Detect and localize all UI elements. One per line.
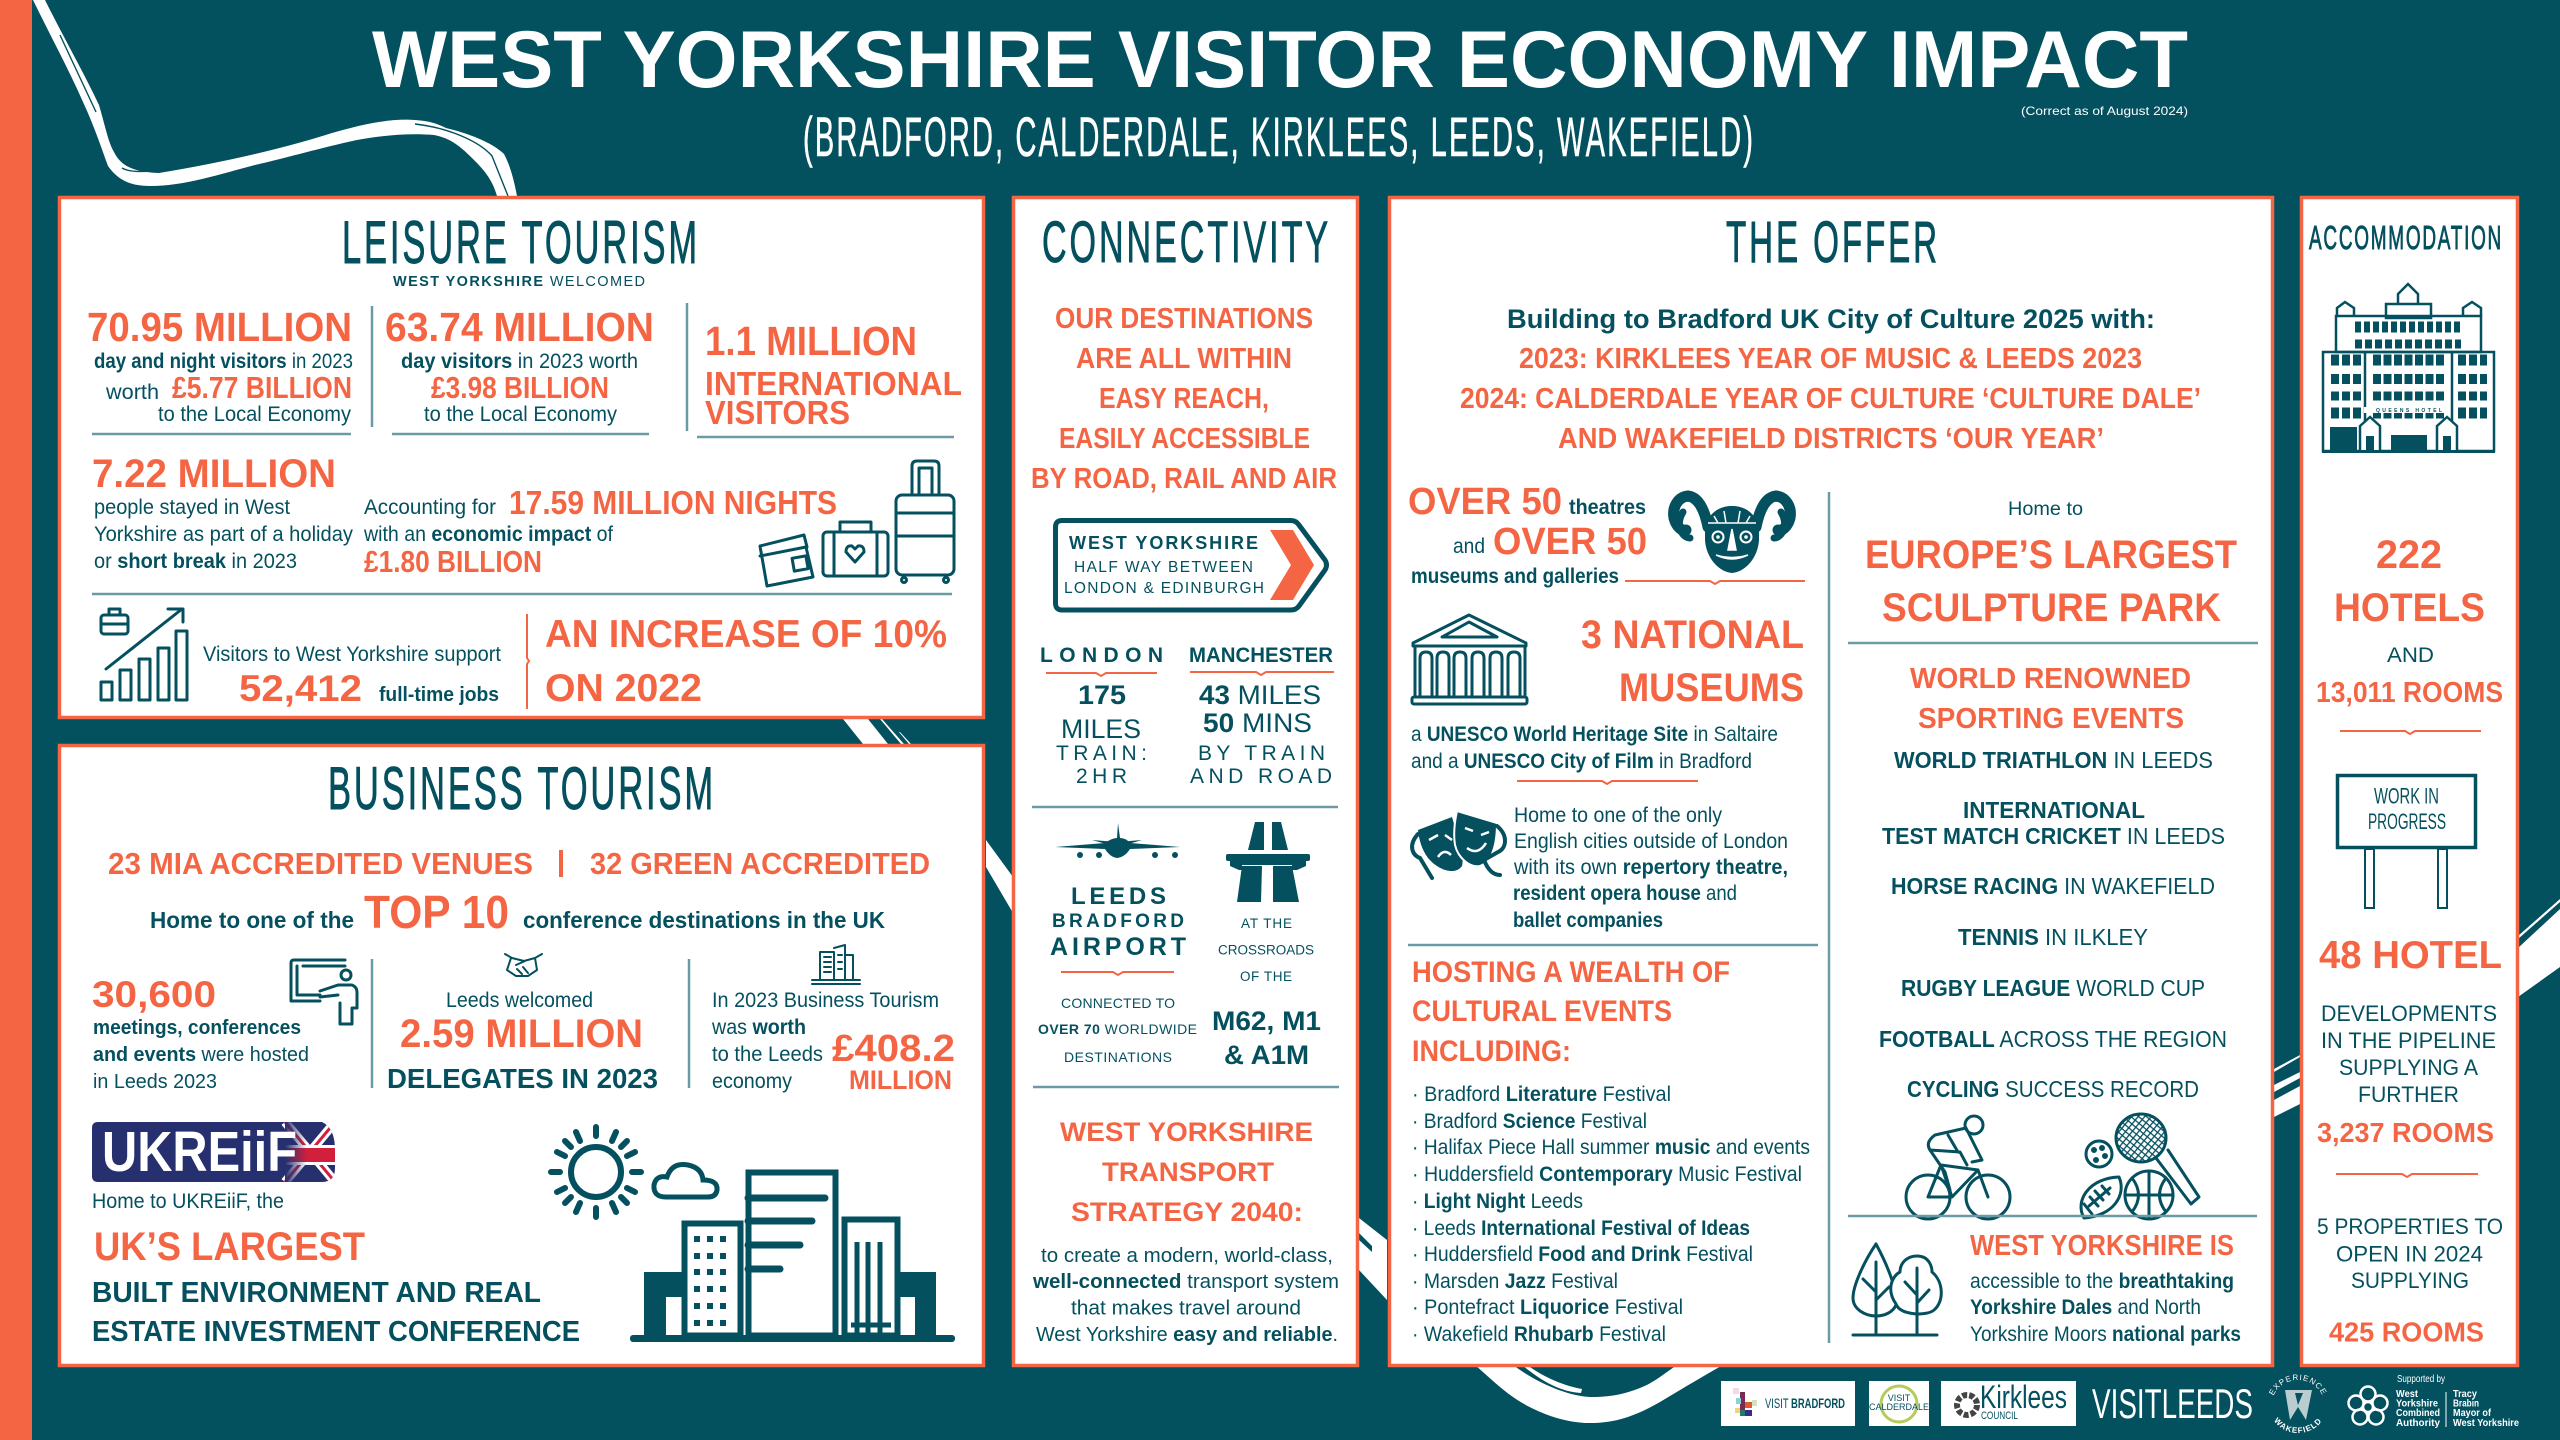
stat: 63.74 million: day visitors in 2023 worth [401, 350, 638, 373]
stat: 63.74 million: £3.98 BILLION [431, 370, 609, 405]
heading: business tourism: BUSINESS TOURISM [328, 755, 716, 822]
icon: mask [1674, 496, 1790, 573]
text: repertory theatre [1513, 804, 1788, 932]
stat: £408.2 million: In 2023 Business Tourism [712, 989, 939, 1012]
stat: international visitors: VISITORS [705, 394, 850, 431]
stat: 70.95 million: £5.77 BILLION [172, 370, 352, 405]
text: transport strategy: TRANSPORT [1102, 1157, 1275, 1187]
stat: 70.95 million: 70.95 MILLION [87, 304, 352, 350]
stat: 30,600 meetings: and events were hosted [93, 1043, 309, 1066]
text: Leeds Bradford Airport: BRADFORD [1052, 911, 1184, 932]
icon: office buildings [812, 945, 860, 984]
list: festivals: · Huddersfield Contemporary Music Festival [1412, 1163, 1802, 1186]
list: sporting events: TENNIS IN ILKLEY [1958, 924, 2148, 950]
text: UNESCO: and a UNESCO City of Film in Bradford [1411, 750, 1752, 773]
text: destinations within reach: ARE ALL WITHIN [1076, 343, 1292, 375]
stat: 5 properties [2317, 1214, 2503, 1348]
stat: £408.2 million: to the Leeds [712, 1043, 823, 1066]
text: transport strategy: WEST YORKSHIRE [1060, 1117, 1313, 1147]
stat: over 50 theatres and museums: OVER 50 [1408, 481, 1562, 523]
stat: 222 hotels: HOTELS [2334, 586, 2485, 630]
list: sporting events: WORLD RENOWNED [1910, 663, 2191, 695]
stat: 30,600 meetings: meetings, conferences [93, 1016, 301, 1039]
text: repertory theatre: Home to one of the only [1514, 804, 1722, 827]
text: crossroads of motorways: CROSSROADS [1218, 942, 1314, 958]
date note: (Correct as of August 2024) [2021, 104, 2188, 118]
stat: 48 hotel developments: FURTHER [2358, 1082, 2459, 1107]
text: crossroads of motorways: OF THE [1240, 969, 1292, 984]
stat: 7.22 million: people stayed in West [94, 496, 290, 519]
list: sporting events: TEST MATCH CRICKET IN LEEDS [1882, 823, 2225, 849]
panel: the offer [1390, 198, 2272, 1366]
logo: West Yorkshire Combined Authority [2348, 1374, 2519, 1429]
list: festivals: · Huddersfield Food and Drink Festival [1412, 1243, 1753, 1266]
accreditation line: 32 GREEN ACCREDITED [590, 846, 930, 881]
text: Leeds Bradford Airport: OVER 70 WORLDWIDE [1038, 1021, 1197, 1037]
stat: over 50 theatres and museums [1408, 481, 1805, 588]
stat: 63.74 million: to the Local Economy [424, 403, 617, 426]
stat: 5 properties: 425 ROOMS [2329, 1316, 2484, 1348]
road sign: halfway between London and Edinburgh: LONDON & EDINBURGH [1064, 580, 1264, 597]
stat: £408.2 million [711, 989, 955, 1095]
logo: West Yorkshire Combined Authority: Yorkshire [2396, 1398, 2438, 1410]
logo: West Yorkshire Combined Authority: Mayor of [2453, 1407, 2491, 1419]
stat: 5 properties: SUPPLYING [2351, 1268, 2469, 1293]
distance: Manchester: 50 MINS [1203, 708, 1312, 738]
title: WEST YORKSHIRE VISITOR ECONOMY IMPACT [372, 15, 2188, 105]
text: national parks: WEST YORKSHIRE IS [1970, 1230, 2234, 1262]
top 10 line: Home to one of the [150, 907, 354, 933]
icon: theatre masks [1412, 811, 1505, 878]
heading: leisure tourism: LEISURE TOURISM [342, 209, 700, 276]
logo: West Yorkshire Combined Authority: Combined [2396, 1407, 2440, 1419]
text: national parks: Yorkshire Moors national parks [1970, 1323, 2241, 1346]
stat: 7.22 million: 7.22 MILLION [92, 452, 336, 496]
text: transport strategy: well-connected transport system [1032, 1271, 1339, 1293]
text: crossroads of motorways: M62, M1 [1212, 1006, 1321, 1036]
road sign: halfway between London and Edinburgh: WEST YORKSHIRE [1069, 533, 1258, 553]
stat: 3 national museums [1581, 613, 1804, 710]
icon: motorway [1226, 822, 1310, 902]
icon: aeroplane [1055, 823, 1180, 858]
text: destinations within reach: OUR DESTINATIONS [1055, 303, 1313, 335]
logo: West Yorkshire Combined Authority: Authority [2396, 1417, 2440, 1429]
text: destinations within reach: BY ROAD, RAIL AND AIR [1031, 463, 1337, 495]
text: repertory theatre: ballet companies [1513, 909, 1663, 932]
icon: hotel building: QUEENS HOTEL [2376, 408, 2442, 414]
stat: 48 hotel developments: SUPPLYING A [2339, 1055, 2478, 1080]
stat: 63.74 million [385, 304, 654, 434]
stat: 7.22 million: Yorkshire as part of a holiday [94, 523, 353, 546]
stat: 3 national museums: 3 NATIONAL [1581, 613, 1804, 657]
stat: full-time jobs: Visitors to West Yorkshire support [203, 643, 501, 666]
stat: international visitors [697, 318, 962, 437]
icon: trees [1853, 1244, 1941, 1335]
text: transport strategy: West Yorkshire easy and reliable. [1036, 1324, 1338, 1346]
icon: sports balls and racket [2081, 1114, 2199, 1219]
stat: increase of 10%: ON 2022 [545, 667, 702, 710]
accreditation line: 23 MIA ACCREDITED VENUES [108, 846, 533, 881]
logo: Experience Wakefield: WAKEFIELD [2274, 1417, 2320, 1434]
stat: over 50 theatres and museums: OVER 50 [1493, 521, 1647, 563]
stat: 7.22 million: or short break in 2023 [94, 550, 297, 573]
sign: work in progress [2338, 776, 2476, 908]
text: destinations within reach [1031, 303, 1337, 495]
distance: Manchester: BY TRAIN [1198, 742, 1325, 765]
stat: 2.59 million delegates: DELEGATES IN 2023 [387, 1063, 658, 1094]
stat: 48 hotel developments: IN THE PIPELINE [2321, 1028, 2496, 1053]
stat: 70.95 million: to the Local Economy [158, 403, 351, 426]
logo: Kirklees Council: Kirklees [1980, 1379, 2067, 1415]
icon: presenter [291, 960, 357, 1024]
list: festivals: · Bradford Literature Festival [1412, 1083, 1671, 1106]
logo: Kirklees Council: COUNCIL [1981, 1410, 2018, 1422]
heading: connectivity: CONNECTIVITY [1042, 210, 1331, 275]
list: sporting events [1879, 663, 2227, 1102]
text: crossroads of motorways: AT THE [1241, 916, 1292, 931]
list: sporting events: FOOTBALL ACROSS THE REGION [1879, 1026, 2227, 1052]
stat: £408.2 million: MILLION [849, 1065, 952, 1095]
stat: 222 hotels: 13,011 ROOMS [2316, 677, 2503, 709]
text: crossroads of motorways: & A1M [1224, 1040, 1309, 1070]
logo: UKREiiF: UKREiiF [102, 1120, 297, 1184]
logo: West Yorkshire Combined Authority: Brabin [2453, 1398, 2479, 1410]
text: city of culture: Building to Bradford UK City of Culture 2025 with: [1507, 304, 2155, 334]
text: largest conference: UK’S LARGEST [94, 1225, 365, 1269]
stat: 48 hotel developments: 3,237 ROOMS [2317, 1117, 2494, 1148]
stat: 5 properties: OPEN IN 2024 [2336, 1242, 2483, 1266]
stat: 48 hotel developments [2317, 934, 2502, 1177]
distance: London: LONDON [1040, 644, 1163, 667]
stat: 48 hotel developments: DEVELOPMENTS [2321, 1001, 2497, 1026]
text: city of culture: AND WAKEFIELD DISTRICTS ‘OUR YEAR’ [1558, 423, 2104, 455]
stat: 7.22 million [92, 452, 353, 573]
distance: London [1040, 644, 1163, 788]
text: transport strategy [1032, 1117, 1339, 1346]
panel: connectivity [1014, 198, 1358, 1366]
stat: full-time jobs: 52,412 [239, 668, 362, 709]
stat: 222 hotels: 222 [2376, 533, 2442, 577]
stat: 2.59 million delegates: Leeds welcomed [446, 989, 593, 1012]
heading: the offer: THE OFFER [1726, 210, 1940, 275]
list: festivals: · Leeds International Festival of Ideas [1412, 1217, 1750, 1240]
text: UNESCO [1411, 723, 1778, 784]
accreditation line [108, 846, 930, 881]
stat: international visitors: 1.1 MILLION [705, 318, 917, 364]
icon: museum building [1412, 615, 1527, 704]
text: repertory theatre: resident opera house and [1513, 882, 1737, 905]
distance: Manchester: 43 MILES [1199, 680, 1321, 710]
text: transport strategy: STRATEGY 2040: [1071, 1197, 1303, 1227]
text: largest conference: BUILT ENVIRONMENT AND REAL [92, 1277, 541, 1309]
icon: luggage and wallet [760, 461, 954, 586]
list: sporting events: WORLD TRIATHLON IN LEEDS [1894, 747, 2213, 773]
icon: handshake [505, 954, 542, 976]
list: festivals: · Bradford Science Festival [1412, 1110, 1647, 1133]
stat: sculpture park [1865, 499, 2237, 630]
logo: Visit Calderdale: CALDERDALE [1869, 1402, 1929, 1412]
logo: Kirklees Council [1941, 1379, 2076, 1426]
stat: international visitors: INTERNATIONAL [705, 365, 962, 402]
text: Leeds Bradford Airport: CONNECTED TO [1061, 995, 1175, 1011]
text: transport strategy: that makes travel around [1071, 1298, 1301, 1320]
logo: Visit Bradford [1721, 1381, 1855, 1426]
stat: 3 national museums: MUSEUMS [1619, 666, 1804, 710]
stat: 48 hotel developments: 48 HOTEL [2319, 934, 2502, 977]
icon: city skyline with sun and cloud [551, 1127, 955, 1342]
stat: 17.59 million nights: Accounting for [364, 496, 496, 519]
logo: Visit Calderdale [1869, 1381, 1929, 1426]
logo: Experience Wakefield [2268, 1374, 2327, 1434]
top 10 line: TOP 10 [364, 886, 509, 938]
list: festivals: · Wakefield Rhubarb Festival [1412, 1323, 1666, 1346]
stat: 30,600 meetings [92, 974, 309, 1093]
stat: 17.59 million nights: with an economic impact of [363, 523, 613, 546]
stat: 17.59 million nights: £1.80 BILLION [364, 544, 542, 579]
stat: sculpture park: Home to [2008, 499, 2083, 520]
road sign: halfway between London and Edinburgh: HALF WAY BETWEEN [1074, 559, 1253, 576]
text: crossroads of motorways [1212, 916, 1321, 1070]
list: festivals: · Pontefract Liquorice Festival [1412, 1296, 1683, 1319]
stat: 5 properties: 5 PROPERTIES TO [2317, 1214, 2503, 1239]
stat: 70.95 million [87, 304, 353, 434]
top 10 line: conference destinations in the UK [523, 907, 885, 933]
text: national parks: accessible to the breathtaking [1970, 1270, 2234, 1293]
stat: increase of 10%: AN INCREASE OF 10% [545, 613, 947, 656]
stat: increase of 10% [545, 613, 947, 710]
text: Leeds Bradford Airport: LEEDS [1071, 883, 1166, 910]
stat: over 50 theatres and museums: and [1453, 535, 1485, 558]
icon: growth chart [101, 609, 187, 700]
stat: 2.59 million delegates: 2.59 MILLION [400, 1012, 643, 1056]
distance: Manchester: AND ROAD [1190, 765, 1332, 788]
stat: £408.2 million: was worth [711, 1016, 806, 1039]
text: Leeds Bradford Airport: AIRPORT [1050, 933, 1186, 961]
text: largest conference: ESTATE INVESTMENT CONFERENCE [92, 1316, 580, 1348]
stat: 222 hotels: AND [2387, 644, 2434, 667]
stat: 17.59 million nights: 17.59 MILLION NIGHTS [509, 484, 837, 521]
logo: Experience Wakefield: EXPERIENCE [2268, 1374, 2327, 1396]
road sign: halfway between London and Edinburgh [1056, 520, 1326, 610]
subheading: WEST YORKSHIRE WELCOMED [393, 274, 647, 290]
list: sporting events: INTERNATIONAL [1963, 797, 2145, 823]
list: festivals: · Marsden Jazz Festival [1412, 1270, 1618, 1293]
list: sporting events: CYCLING SUCCESS RECORD [1907, 1076, 2199, 1102]
logo: West Yorkshire Combined Authority: Tracy [2453, 1388, 2477, 1400]
stat: 17.59 million nights [363, 484, 837, 579]
heading: cultural events: HOSTING A WEALTH OF [1412, 956, 1730, 989]
stat: £408.2 million: economy [712, 1070, 792, 1093]
text: repertory theatre: English cities outside of London [1514, 830, 1788, 853]
stat: over 50 theatres and museums: museums and galleries [1411, 565, 1619, 588]
heading: cultural events: INCLUDING: [1412, 1035, 1571, 1068]
heading: cultural events [1412, 956, 1730, 1068]
list: festivals: · Light Night Leeds [1412, 1190, 1583, 1213]
text: city of culture: 2024: CALDERDALE YEAR OF CULTURE ‘CULTURE DALE’ [1460, 383, 2201, 415]
logo: Visit Leeds: VISITLEEDS [2092, 1380, 2253, 1427]
top 10 line [150, 886, 885, 938]
list: sporting events: HORSE RACING IN WAKEFIELD [1891, 873, 2215, 899]
text: largest conference: Home to UKREiiF, the [92, 1190, 284, 1213]
orange side bar [0, 0, 32, 1440]
stat: 70.95 million: worth [105, 381, 159, 404]
text: largest conference [92, 1190, 580, 1348]
distance: Manchester [1189, 644, 1334, 788]
icon: cyclist [1906, 1116, 2010, 1219]
list: festivals: · Halifax Piece Hall summer music and events [1412, 1136, 1810, 1159]
text: city of culture [1460, 304, 2201, 455]
icon: hotel building [2322, 284, 2495, 453]
sign: work in progress: PROGRESS [2368, 809, 2446, 834]
text: national parks: Yorkshire Dales and North [1970, 1296, 2201, 1319]
logo: Visit Calderdale: VISIT [1888, 1393, 1911, 1403]
logo: West Yorkshire Combined Authority: Supported by [2397, 1374, 2445, 1385]
text: city of culture: 2023: KIRKLEES YEAR OF MUSIC & LEEDS 2023 [1519, 343, 2142, 375]
panel: accommodation [2302, 198, 2518, 1366]
text: Leeds Bradford Airport [1038, 883, 1197, 1065]
stat: 222 hotels [2316, 533, 2503, 734]
stat: 63.74 million: 63.74 MILLION [385, 304, 654, 350]
distance: London: 2HR [1076, 765, 1127, 788]
sign: work in progress: WORK IN [2374, 784, 2439, 808]
stat: full-time jobs [203, 643, 501, 709]
stat: 30,600 meetings: in Leeds 2023 [93, 1070, 217, 1093]
stat: 2.59 million delegates [387, 989, 658, 1094]
text: national parks [1970, 1230, 2241, 1346]
text: repertory theatre: with its own repertory theatre, [1513, 856, 1788, 879]
distance: Manchester: MANCHESTER [1189, 644, 1333, 667]
stat: 70.95 million: day and night visitors in 2023 [94, 350, 353, 373]
panel: leisure tourism [60, 198, 984, 718]
stat: sculpture park: EUROPE’S LARGEST [1865, 533, 2237, 577]
list: sporting events: SPORTING EVENTS [1918, 703, 2184, 735]
stat: sculpture park: SCULPTURE PARK [1882, 586, 2221, 630]
stat: full-time jobs: full-time jobs [379, 684, 499, 706]
logo: West Yorkshire Combined Authority: West [2396, 1388, 2418, 1400]
list: sporting events: RUGBY LEAGUE WORLD CUP [1901, 975, 2205, 1001]
distance: London: TRAIN: [1056, 742, 1147, 765]
logo: West Yorkshire Combined Authority: West Yorkshire [2453, 1417, 2519, 1429]
stat: £408.2 million: £408.2 [832, 1028, 955, 1070]
stat: 30,600 meetings: 30,600 [92, 974, 216, 1015]
logo: Visit Bradford: VISIT BRADFORD [1765, 1395, 1845, 1411]
heading: cultural events: CULTURAL EVENTS [1412, 995, 1672, 1028]
distance: London: 175 [1078, 680, 1126, 710]
text: destinations within reach: EASY REACH, [1099, 383, 1269, 415]
panel: business tourism [60, 746, 984, 1366]
distance: London: MILES [1061, 714, 1141, 744]
stat: over 50 theatres and museums: theatres [1569, 496, 1646, 519]
text: Leeds Bradford Airport: DESTINATIONS [1064, 1049, 1172, 1065]
list: festivals [1412, 1083, 1810, 1346]
text: destinations within reach: EASILY ACCESSIBLE [1059, 423, 1310, 455]
text: UNESCO: a UNESCO World Heritage Site in Saltaire [1411, 723, 1778, 746]
text: transport strategy: to create a modern, world-class, [1041, 1245, 1333, 1267]
